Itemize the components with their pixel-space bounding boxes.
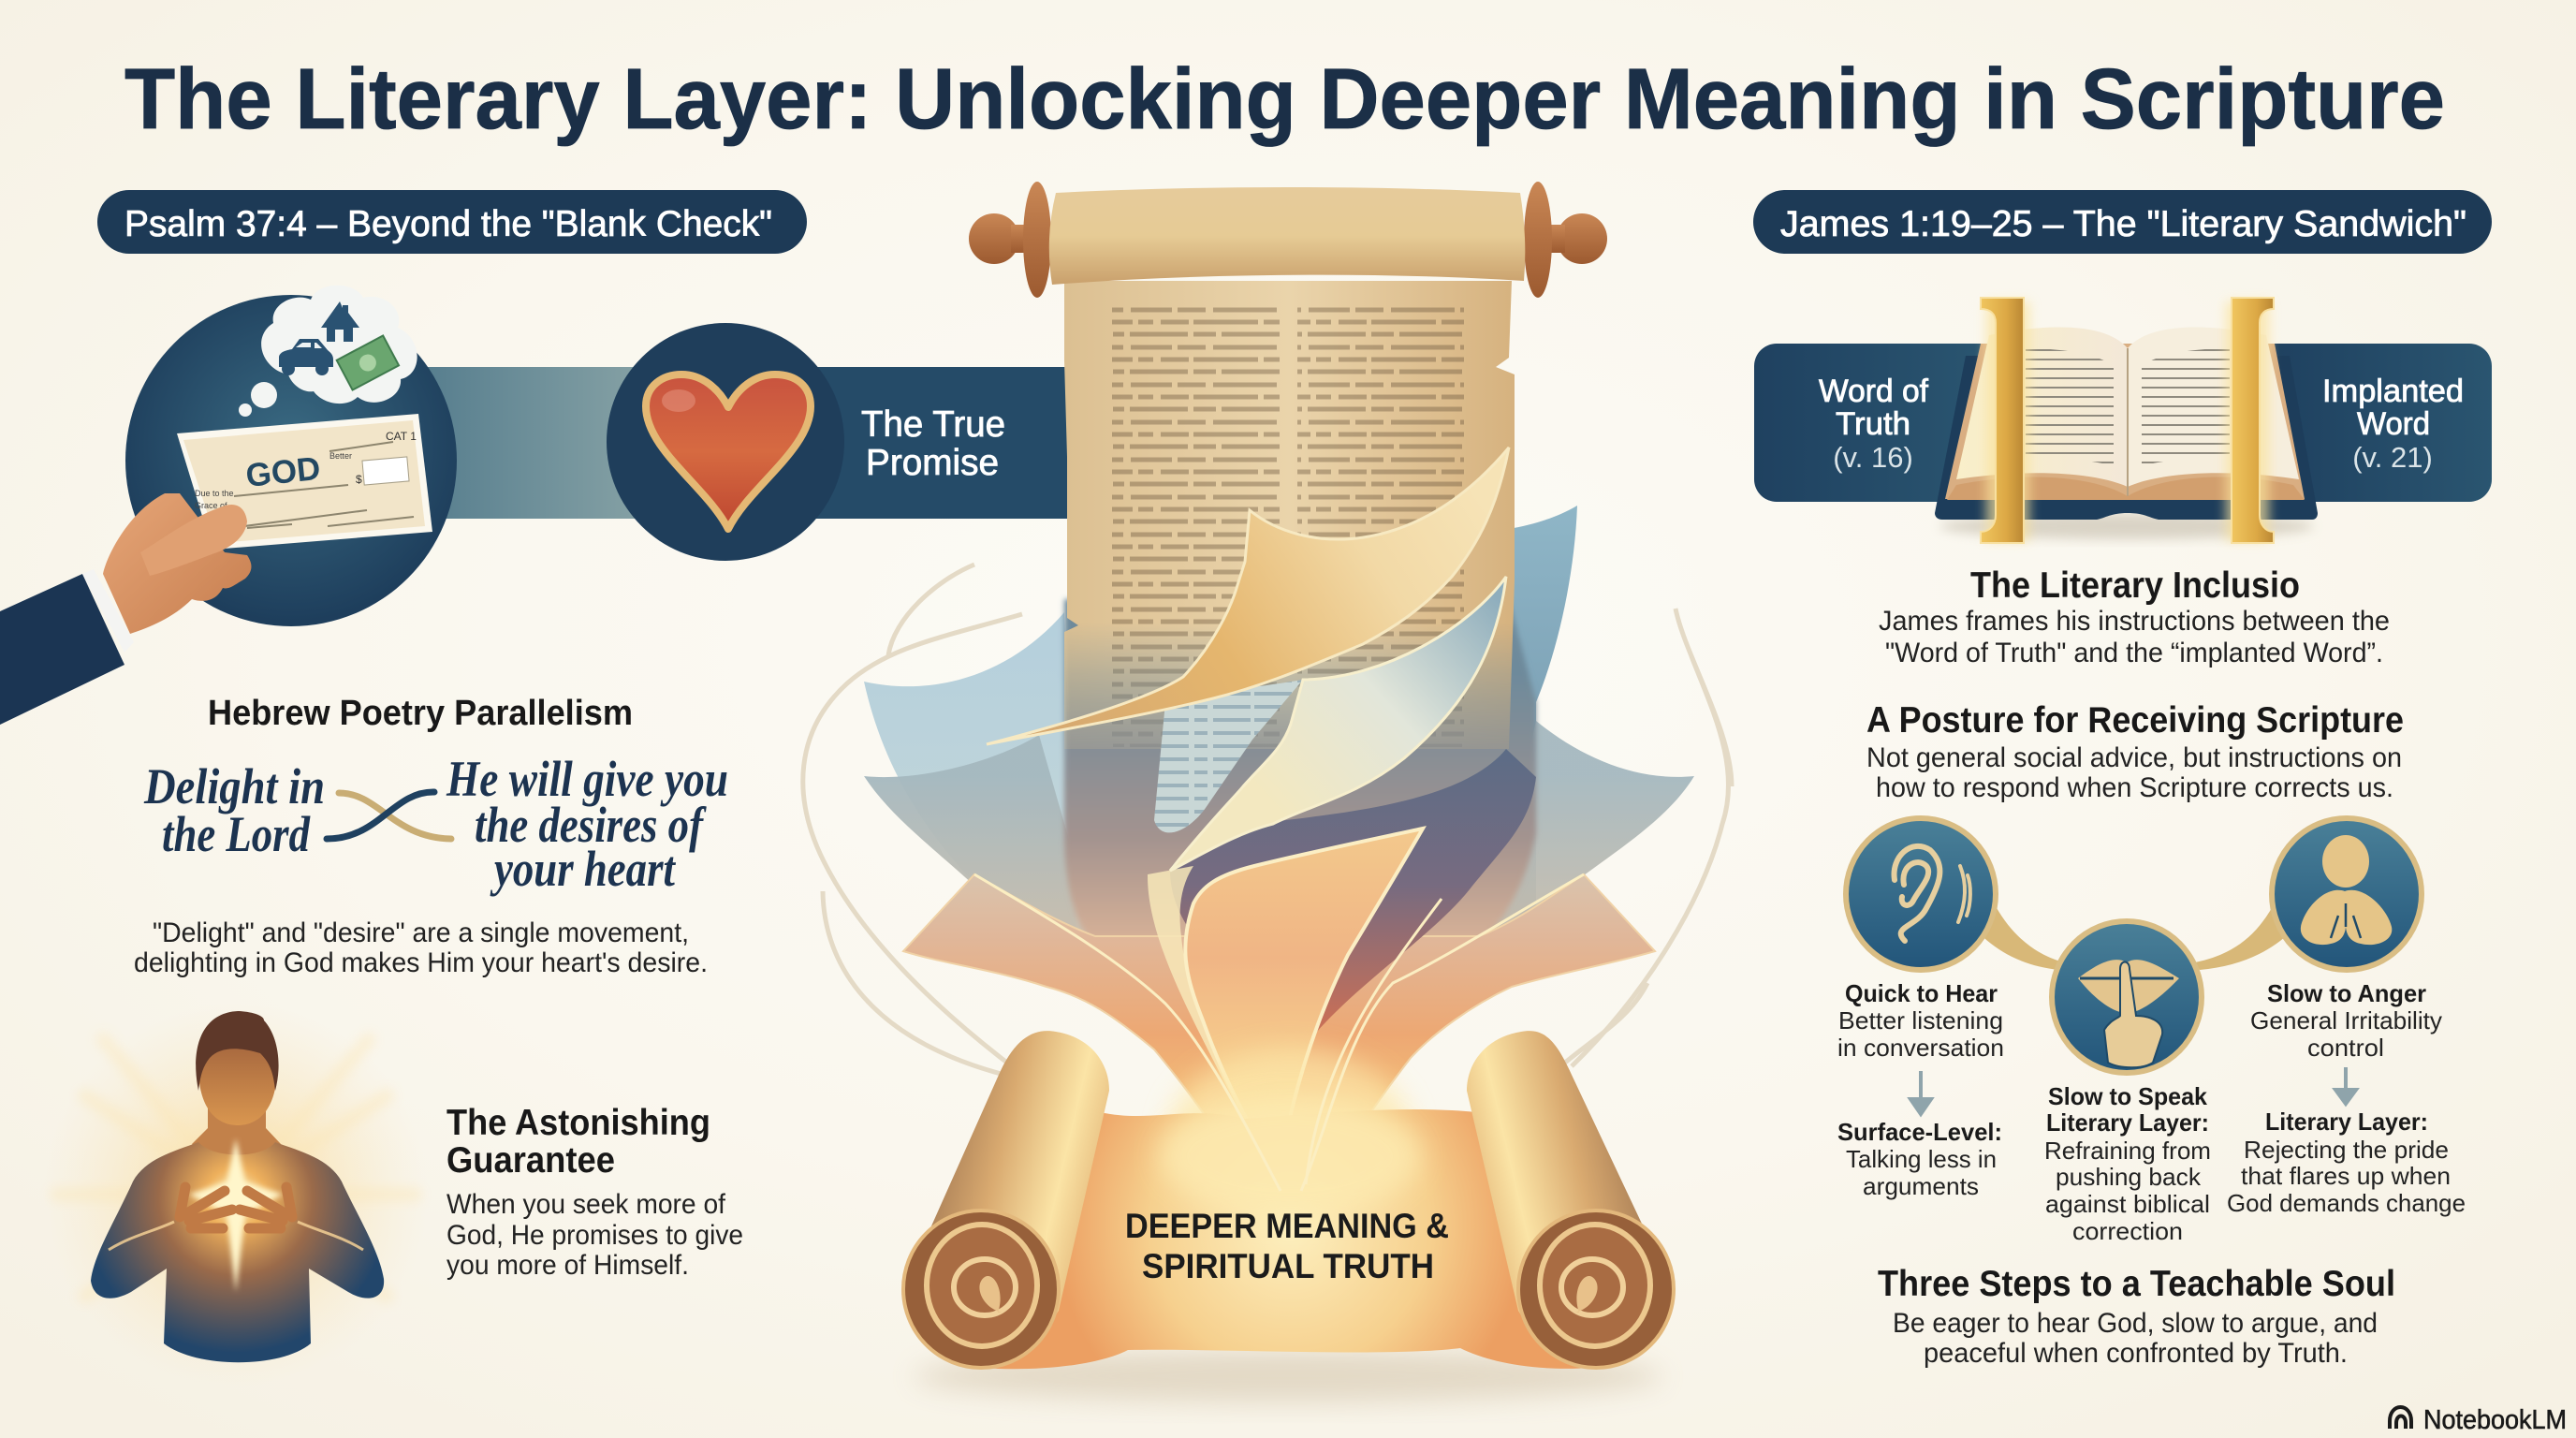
text: The Astonishing Guarantee: God, He promises to give — [446, 1220, 743, 1251]
wisps — [803, 565, 1732, 1083]
text: The Astonishing Guarantee: When you seek more of — [446, 1189, 726, 1220]
figure: central light — [189, 1138, 283, 1292]
figure: neck — [192, 1100, 281, 1160]
icon: house — [321, 301, 359, 342]
icon: hand back — [103, 493, 251, 634]
gold bracket right — [2232, 298, 2274, 543]
text: The Literary Inclusio: The Literary Inclusio — [1970, 565, 2300, 606]
band connecting check to true promise — [412, 367, 1086, 519]
illustration: man with glowing heart — [44, 1003, 428, 1387]
icon: blank check: CAT 1 — [386, 430, 417, 443]
text: Three Steps to a Teachable Soul: Be eager to hear God, slow to argue, and — [1893, 1308, 2378, 1339]
column: Quick to Hear: Talking less in — [1846, 1145, 1997, 1173]
text: The Literary Inclusio: James frames his instructions between the — [1879, 606, 2390, 637]
label: Deeper Meaning & Spiritual Truth — [1125, 1207, 1449, 1285]
column: Slow to Anger: Slow to Anger — [2267, 979, 2426, 1007]
column: Quick to Hear: Surface-Level: — [1837, 1118, 2002, 1146]
icon: ear medallion — [1846, 818, 1996, 970]
icon: blank check: Better — [329, 451, 352, 461]
arrow down — [1910, 1071, 1931, 1114]
right roll — [1467, 1031, 1674, 1368]
bracket glow — [1986, 301, 2269, 541]
panel: James 1:19-25 right column — [1753, 190, 2492, 1369]
top wooden roller — [969, 182, 1607, 298]
icon: open book with gold brackets — [1935, 298, 2318, 543]
figure: hair — [196, 1011, 279, 1091]
pale sheet with text fragment — [1154, 680, 1303, 832]
icon: blank check: Due to the — [195, 489, 234, 498]
icon: blank check: Grace of — [195, 501, 227, 510]
text: delight and desire — [134, 917, 708, 978]
column: Quick to Hear: arguments — [1863, 1172, 1979, 1200]
text: The Astonishing Guarantee — [446, 1103, 743, 1281]
icon: blank check: $ — [356, 473, 362, 486]
column: Quick to Hear — [1837, 979, 2004, 1200]
text: The Literary Inclusio — [1879, 565, 2390, 668]
unrolled parchment panel — [983, 1109, 1591, 1369]
band: Implanted Word: Implanted — [2322, 374, 2464, 409]
dark flame sheet — [1170, 749, 1536, 1039]
heading: Hebrew Poetry Parallelism: Hebrew Poetry Parallelism — [208, 694, 633, 733]
text: delight and desire: "Delight" and "desire" are a single movement, — [153, 917, 689, 948]
parchment curl — [987, 448, 1509, 744]
center illustration: scroll dissolving into deeper meaning — [803, 182, 1732, 1402]
text: Three Steps to a Teachable Soul — [1878, 1264, 2395, 1369]
script parallelism phrases: your heart — [490, 841, 677, 897]
illustration: hand holding blank check to God — [0, 286, 457, 725]
central column — [1064, 599, 1536, 946]
script parallelism phrases: the desires of — [475, 797, 707, 853]
column: Slow to Speak: Refraining from — [2044, 1137, 2211, 1165]
icon: car — [279, 339, 333, 375]
script parallelism phrases: the Lord — [162, 806, 311, 862]
gold bracket left — [1981, 298, 2024, 543]
text: A Posture for Receiving Scripture: Not general social advice, but instructions on — [1866, 742, 2402, 773]
connectors between medallions — [1973, 906, 2295, 970]
icon: jacket sleeve and cuff — [0, 569, 134, 725]
text: A Posture for Receiving Scripture — [1866, 700, 2404, 803]
title: The Literary Layer: Unlocking Deeper Meaning in Scripture — [124, 51, 2445, 147]
NotebookLM logo: NotebookLM — [2423, 1405, 2567, 1435]
column: Quick to Hear: in conversation — [1837, 1034, 2004, 1062]
text: The Astonishing Guarantee: Guarantee — [446, 1140, 615, 1181]
funnel of peach sheets — [903, 874, 1655, 1208]
label: Deeper Meaning & Spiritual Truth: SPIRITUAL TRUTH — [1142, 1247, 1434, 1285]
icon: crossing connector — [327, 792, 451, 839]
heading pill: James: James 1:19–25 – The "Literary Sandwich" — [1780, 204, 2466, 244]
label: The True Promise: Promise — [866, 443, 999, 483]
icon: thought cloud with house, car and money — [239, 286, 417, 417]
column: Slow to Speak: against biblical — [2045, 1190, 2210, 1218]
icon: thumb — [140, 505, 247, 576]
label: The True Promise — [861, 404, 1005, 483]
script parallelism phrases: He will give you — [446, 751, 728, 807]
label: Deeper Meaning & Spiritual Truth: DEEPER MEANING & — [1125, 1207, 1449, 1245]
text: delight and desire: delighting in God makes Him your heart's desire. — [134, 947, 708, 978]
icon: praying figure medallion — [2272, 818, 2422, 970]
text: Three Steps to a Teachable Soul: Three Steps to a Teachable Soul — [1878, 1264, 2395, 1304]
column: Quick to Hear: Better listening — [1838, 1006, 2003, 1034]
script parallelism phrases: Delight in — [143, 758, 325, 814]
text: The Astonishing Guarantee: you more of Himself. — [446, 1250, 689, 1281]
column: Slow to Anger: Literary Layer: — [2265, 1108, 2428, 1136]
figure: hands — [180, 1187, 292, 1228]
script parallelism phrases — [143, 751, 728, 897]
band: Word of Truth: Truth — [1836, 406, 1910, 442]
column: Slow to Anger: General Irritability — [2250, 1006, 2442, 1034]
text: The Astonishing Guarantee: The Astonishing — [446, 1103, 710, 1143]
top parchment page with faux text — [1064, 281, 1515, 749]
band: Implanted Word: (v. 21) — [2352, 441, 2433, 474]
figure: torso and arms — [91, 1142, 384, 1362]
band: Word of Truth: (v. 16) — [1833, 441, 1913, 474]
column: Slow to Anger: Rejecting the pride — [2244, 1136, 2449, 1164]
panel: Psalm 37:4 left column — [0, 190, 1086, 1387]
column: Slow to Anger: God demands change — [2227, 1189, 2466, 1217]
left roll — [903, 1031, 1109, 1368]
column: Slow to Anger: control — [2307, 1034, 2384, 1062]
icon: blank check: GOD — [244, 450, 322, 494]
figure: arm highlights — [109, 1222, 363, 1250]
sheet: lower right — [1479, 721, 1694, 974]
band: Implanted Word: Word — [2357, 406, 2430, 442]
sheet: left blue — [864, 612, 1076, 936]
heading pill: Psalm 37:4 — [97, 190, 807, 254]
column: Slow to Speak — [2044, 1082, 2211, 1245]
text: The Literary Inclusio: "Word of Truth" and the “implanted Word”. — [1885, 638, 2383, 668]
sheet: lower left — [864, 735, 1105, 964]
heading pill: James — [1753, 190, 2492, 254]
heading pill: Psalm 37:4: Psalm 37:4 – Beyond the "Blank Check" — [124, 204, 772, 244]
icon: heart in circle — [607, 323, 844, 561]
peach flame petal — [1185, 829, 1423, 1180]
bottom scroll — [903, 874, 1674, 1402]
glow and rays converging on panel — [974, 874, 1584, 1217]
text: A Posture for Receiving Scripture: A Posture for Receiving Scripture — [1866, 700, 2404, 741]
column: Slow to Speak: correction — [2072, 1217, 2183, 1245]
icon: money — [337, 335, 399, 390]
icon: blank check — [177, 414, 432, 550]
sheet: right blue — [1310, 506, 1577, 936]
icon: shushing lips medallion — [2052, 921, 2202, 1073]
cream strip beside flame — [1148, 866, 1273, 1180]
band: Word of Truth — [1754, 344, 1984, 502]
figure: face — [198, 1047, 277, 1125]
band: Implanted Word — [2275, 344, 2492, 502]
column: Slow to Speak: Slow to Speak — [2048, 1082, 2208, 1110]
text: Three Steps to a Teachable Soul: peaceful when confronted by Truth. — [1924, 1338, 2348, 1369]
label: The True Promise: The True — [861, 404, 1005, 445]
text: A Posture for Receiving Scripture: how to respond when Scripture corrects us. — [1876, 772, 2393, 803]
cream swoosh — [1170, 577, 1506, 871]
column: Slow to Speak: pushing back — [2056, 1163, 2202, 1191]
glow above scroll — [1168, 1049, 1412, 1217]
band: Word of Truth: Word of — [1819, 374, 1929, 409]
column: Slow to Anger — [2227, 979, 2466, 1217]
arrow down — [2335, 1067, 2356, 1104]
column: Slow to Speak: Literary Layer: — [2046, 1108, 2209, 1137]
column: Quick to Hear: Quick to Hear — [1845, 979, 1998, 1007]
column: Slow to Anger: that flares up when — [2241, 1162, 2451, 1190]
